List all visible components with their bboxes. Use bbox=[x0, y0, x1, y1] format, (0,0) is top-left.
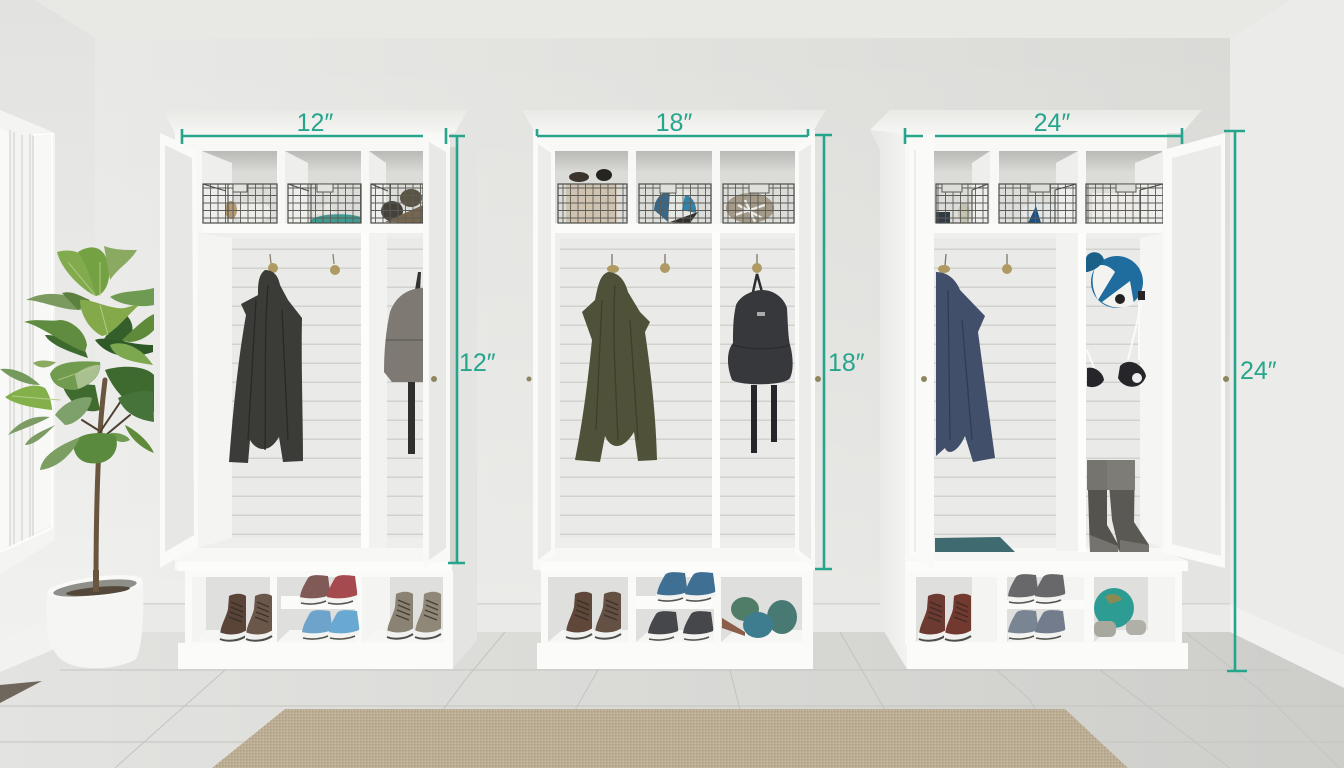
cabinet 3 basket contents bbox=[936, 193, 1142, 223]
cabinet 1: 12 inch depth bbox=[160, 110, 490, 669]
dimension: cabinet 2 width bbox=[537, 109, 808, 137]
cabinet 3: 24 inch depth bbox=[870, 110, 1229, 669]
cabinet 1 carcass bbox=[175, 130, 450, 570]
plant light front leaves bbox=[0, 246, 154, 470]
cabinet 3 shiplap back bbox=[934, 233, 1165, 553]
cabinet 3 hooks bbox=[938, 254, 1012, 274]
cabinet 1 shiplap back bbox=[198, 233, 423, 553]
dimension: cabinet 3 height bbox=[1224, 131, 1277, 671]
cabinet 3 crown bbox=[870, 110, 1202, 134]
cabinet 1 right side bbox=[449, 135, 490, 668]
cabinet 2 left door bbox=[533, 133, 555, 570]
cabinet 2 bench bbox=[540, 548, 813, 571]
cabinet 1 shelf bbox=[203, 224, 423, 233]
cabinet 3 rubber boots bbox=[1087, 460, 1149, 554]
cabinet 2 carcass bbox=[533, 130, 815, 570]
cabinet 1 right door bbox=[423, 132, 449, 570]
dimension: cabinet 3 height: 24″ bbox=[1240, 357, 1277, 385]
cabinet 3 coat bbox=[936, 272, 995, 462]
cabinet 3 folded mat bbox=[935, 537, 1015, 557]
dimension: cabinet 3 width: 24″ bbox=[1034, 109, 1070, 137]
dimension: cabinet 2 width: 18″ bbox=[656, 109, 692, 137]
rug bbox=[212, 709, 1128, 768]
cabinet 1 wire baskets bbox=[203, 184, 423, 223]
cabinet 2 base bbox=[537, 571, 813, 669]
cabinet 1 left door bbox=[160, 133, 198, 568]
cabinet 2 backpack bbox=[728, 274, 793, 453]
cabinet 1 shoes bbox=[219, 575, 442, 641]
cabinet 3 base bbox=[905, 571, 1188, 669]
cabinet 3 left door bbox=[909, 132, 934, 570]
dimension: cabinet 1 height bbox=[448, 137, 496, 563]
cabinet 2 right door bbox=[795, 133, 815, 570]
cabinet 1 bench bbox=[177, 548, 452, 571]
cabinet 1 coat bbox=[229, 270, 303, 463]
cabinet 2 crown bbox=[522, 110, 826, 134]
cabinet 1 crown bbox=[163, 110, 467, 135]
cabinet 2 upper cubbies bbox=[555, 151, 795, 223]
cabinet 3 hanging gloves bbox=[1087, 302, 1146, 387]
plant trunk bbox=[82, 380, 130, 590]
cabinet 1 upper cubbies bbox=[202, 151, 423, 223]
cabinet 2 shelf bbox=[555, 224, 795, 233]
cabinet 2 door knob bbox=[526, 376, 821, 382]
cabinet 2 hooks bbox=[607, 254, 762, 273]
cabinet 3 carcass bbox=[905, 130, 1167, 570]
dimension: cabinet 2 height bbox=[815, 135, 865, 569]
cabinet 2 shiplap back bbox=[555, 233, 795, 553]
cabinet 3 upper cubbies bbox=[934, 151, 1165, 223]
plant pot bbox=[46, 570, 144, 668]
cabinet 2 wire baskets bbox=[558, 184, 794, 223]
cabinet 1 basket contents bbox=[225, 189, 423, 223]
cabinet 1 backpack bbox=[384, 272, 423, 454]
cabinet 3 sports ball bbox=[1086, 252, 1145, 308]
window bbox=[0, 110, 55, 575]
cabinet 1 door knob bbox=[431, 376, 437, 382]
dimension: cabinet 3 width bbox=[905, 109, 1182, 144]
cabinet 2 coat bbox=[575, 272, 657, 462]
cabinet 3 right door bbox=[1163, 133, 1225, 568]
cabinet 3 door knobs bbox=[921, 376, 1229, 382]
cabinet 2: 18 inch depth bbox=[522, 110, 826, 669]
cabinet 3 shoes and balls bbox=[918, 574, 1146, 641]
dimension: cabinet 1 width: 12″ bbox=[297, 109, 333, 137]
cabinet 1 base bbox=[178, 571, 453, 669]
dimension: cabinet 2 height: 18″ bbox=[828, 349, 865, 377]
cabinet 3 shelf bbox=[934, 224, 1162, 233]
floor tiles bbox=[0, 632, 1344, 768]
floor vent bbox=[0, 681, 42, 703]
cabinet 1 hooks bbox=[268, 254, 340, 275]
fiddle leaf fig plant bbox=[0, 246, 154, 668]
cabinet 2 basket contents bbox=[566, 169, 774, 224]
cabinet 3 wire baskets bbox=[936, 184, 1163, 223]
dimension: cabinet 1 width bbox=[182, 109, 465, 144]
dimension: cabinet 1 height: 12″ bbox=[459, 349, 496, 377]
cabinet 2 shoes bbox=[565, 572, 797, 640]
cabinet 3 bench bbox=[906, 552, 1188, 571]
cabinet 3 left side bbox=[870, 130, 910, 669]
plant dark back leaves bbox=[45, 315, 154, 422]
